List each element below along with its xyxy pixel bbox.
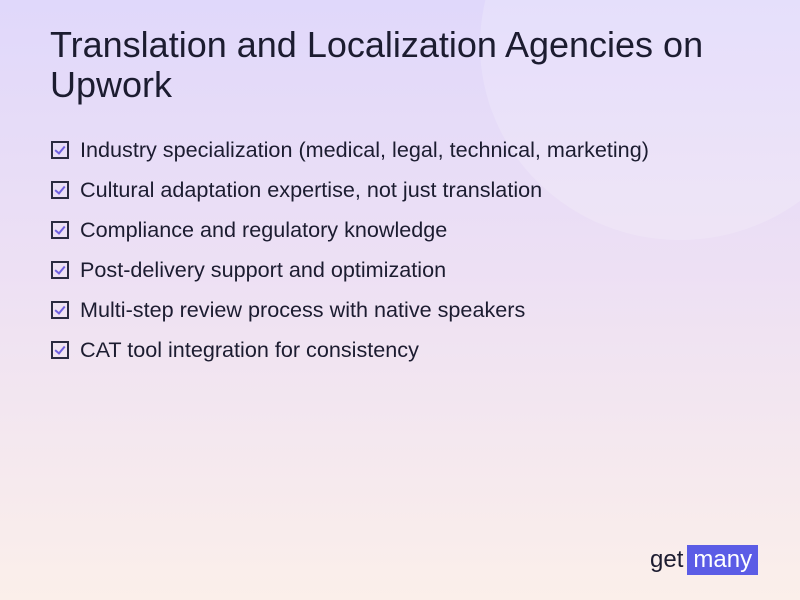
item 4: Post-delivery support and optimization — [80, 257, 446, 282]
logo: get — [650, 546, 683, 573]
logo — [650, 545, 758, 575]
item 6: CAT tool integration for consistency — [80, 337, 419, 362]
item 2: Cultural adaptation expertise, not just translation — [80, 177, 542, 202]
item 5: Multi-step review process with native speakers — [80, 297, 525, 322]
item 1: Industry specialization (medical, legal, technical, marketing) — [80, 137, 649, 162]
title: Translation and Localization Agencies on Upwork — [50, 24, 703, 105]
item 3: Compliance and regulatory knowledge — [80, 217, 447, 242]
checklist — [51, 137, 649, 362]
logo: many — [693, 546, 752, 573]
